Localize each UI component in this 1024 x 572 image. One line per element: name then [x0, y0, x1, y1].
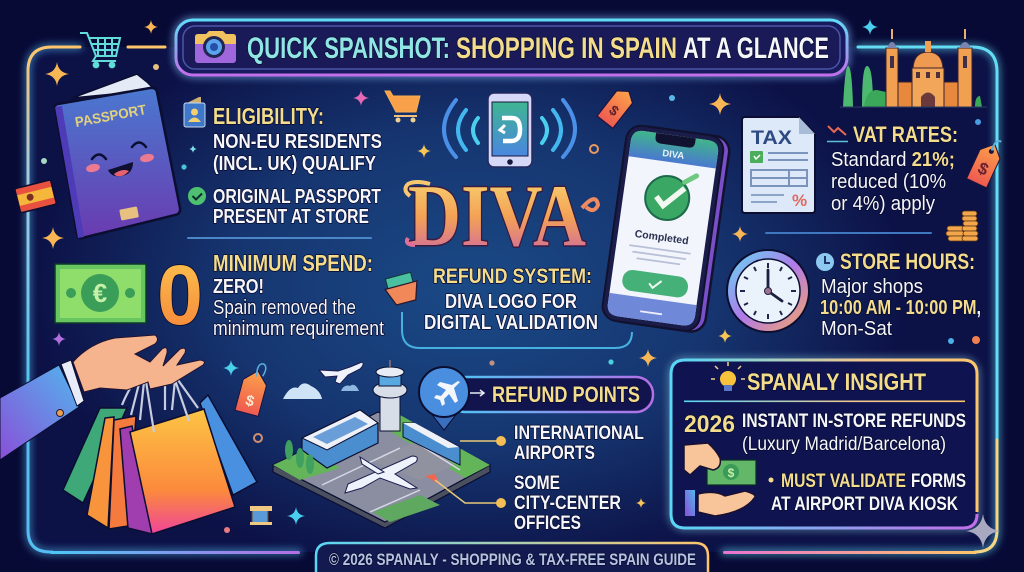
- tower: [380, 395, 400, 431]
- icon: green check: [188, 187, 206, 205]
- store hours text: Major shops: [821, 276, 923, 298]
- icon: passport: [55, 74, 180, 238]
- icon: euro banknote: €: [93, 278, 107, 308]
- refund points heading: REFUND POINTS: [492, 382, 640, 407]
- plane parked: [345, 456, 417, 493]
- icon: down arrow: [827, 126, 848, 142]
- icon: plane pin: [419, 367, 469, 430]
- title text: [247, 32, 829, 65]
- hand: [73, 335, 204, 392]
- store hours block: [816, 249, 981, 340]
- tax label: TAX: [751, 128, 792, 149]
- handles: [122, 370, 198, 432]
- refund locations text: SOME: [514, 473, 560, 494]
- store hours days: Mon-Sat: [821, 318, 892, 340]
- validate forms text: FORMS: [911, 471, 966, 492]
- validate forms text: [768, 471, 966, 515]
- icon: price tag lower: [235, 360, 272, 416]
- year 2026: 2026: [684, 411, 735, 438]
- icon: clock: [727, 250, 809, 332]
- icon: shopping cart top: [80, 33, 120, 67]
- minimum spend text: [213, 297, 384, 340]
- refund locations text: CITY-CENTER: [514, 493, 621, 514]
- refund system text: DIGITAL VALIDATION: [424, 312, 598, 334]
- vat rates text: Standard 21%;: [831, 149, 955, 171]
- plane flying: [319, 362, 363, 384]
- refund system block: [424, 265, 598, 334]
- icon: spain flag: [15, 180, 57, 213]
- hangar: [403, 423, 460, 465]
- validate forms text: AT AIRPORT DIVA KIOSK: [771, 494, 958, 515]
- bag orange: [87, 417, 114, 528]
- bag green: [63, 408, 127, 503]
- vat rates text: [831, 149, 955, 215]
- confirm button: [621, 269, 689, 299]
- refund points pill: [419, 367, 653, 430]
- validate forms text: MUST VALIDATE: [781, 471, 906, 492]
- icon: small building: [250, 506, 272, 525]
- icon: coins: [946, 211, 978, 241]
- icon: tag right: $: [975, 158, 992, 180]
- icon: price tag lower: $: [244, 392, 257, 411]
- icon: camera: [195, 31, 236, 63]
- decorative star corner: [966, 514, 1000, 548]
- percent sign: %: [792, 191, 807, 210]
- passport face: [85, 142, 155, 176]
- eligibility text: (INCL. UK) QUALIFY: [213, 153, 377, 175]
- bag blue: [200, 395, 257, 495]
- icon: hands and banknote: $: [728, 466, 735, 480]
- instant refunds text: INSTANT IN-STORE REFUNDS: [742, 411, 966, 432]
- minimum spend block: [213, 250, 384, 340]
- icon: small clock: [816, 253, 834, 271]
- footer: [316, 543, 708, 572]
- hand with shopping bags: [0, 335, 257, 534]
- vat rates block: [827, 122, 958, 215]
- zero label: ZERO!: [213, 276, 264, 298]
- big zero: 0: [157, 248, 203, 342]
- connector international airports: [460, 436, 506, 446]
- phone app title: DIVA: [662, 148, 685, 162]
- vat rates text: or 4%) apply: [831, 193, 935, 215]
- icon: price tag center: $: [606, 102, 622, 119]
- passport requirement text: ORIGINAL PASSPORT: [213, 186, 381, 208]
- store hours time: 10:00 AM - 10:00 PM,: [820, 297, 981, 319]
- sleeve: [0, 365, 79, 460]
- terminal: [302, 410, 378, 468]
- spanaly insight panel: [671, 360, 977, 528]
- trees: [285, 440, 314, 474]
- minimum spend text: Spain removed the: [213, 297, 356, 319]
- store hours heading: STORE HOURS:: [840, 249, 975, 274]
- island base: [273, 465, 490, 528]
- eligibility heading: ELIGIBILITY:: [213, 103, 324, 129]
- passport requirement text: [213, 186, 381, 228]
- refund system text: [424, 291, 598, 334]
- refund locations text: OFFICES: [514, 513, 581, 534]
- bag front: [130, 409, 235, 534]
- title text: AT A GLANCE: [683, 32, 829, 65]
- eligibility block: [184, 97, 382, 228]
- icon: wallet: [382, 271, 422, 307]
- icon: cathedral: [840, 29, 987, 108]
- footer text: © 2026 SPANALY - SHOPPING & TAX-FREE SPAIN GUIDE: [329, 550, 696, 569]
- eligibility text: [213, 131, 382, 175]
- completed label: Completed: [634, 228, 689, 247]
- icon: hands and banknote: [684, 443, 756, 516]
- icon: wifi phone: [444, 93, 575, 167]
- eligibility text: NON-EU RESIDENTS: [213, 131, 382, 153]
- icon: euro banknote: [55, 264, 146, 323]
- icon: price tag center: [597, 85, 637, 128]
- title text: QUICK SPANSHOT:: [247, 32, 450, 65]
- refund locations text: INTERNATIONAL: [514, 423, 644, 444]
- refund locations text: [514, 423, 644, 534]
- refund system heading: REFUND SYSTEM:: [433, 265, 592, 288]
- icon: id badge: [184, 97, 205, 127]
- title text: SHOPPING IN SPAIN: [456, 32, 677, 65]
- vat rates heading: VAT RATES:: [853, 122, 958, 147]
- airport illustration: [273, 360, 490, 528]
- minimum spend heading: MINIMUM SPEND:: [213, 250, 373, 276]
- title banner: [176, 20, 847, 75]
- icon: small orange cart: [385, 91, 420, 122]
- big phone: [601, 124, 731, 333]
- refund locations text: AIRPORTS: [514, 443, 595, 464]
- DIVA logo: DIVA: [408, 168, 586, 265]
- minimum spend text: minimum requirement: [213, 318, 384, 340]
- clouds: [283, 383, 359, 399]
- icon: tag right: [967, 135, 1007, 188]
- connector city offices: [435, 480, 506, 508]
- insight heading: SPANALY INSIGHT: [747, 369, 926, 396]
- passport label: PASSPORT: [74, 101, 148, 130]
- icon: tax document: [742, 117, 815, 213]
- icon: light bulb: [711, 362, 745, 391]
- refund system text: DIVA LOGO FOR: [445, 291, 577, 313]
- completed check: [642, 169, 697, 223]
- passport requirement text: PRESENT AT STORE: [213, 206, 369, 228]
- luxury cities text: (Luxury Madrid/Barcelona): [742, 434, 946, 455]
- bag purple: [120, 426, 152, 534]
- vat rates text: reduced (10%: [831, 171, 946, 193]
